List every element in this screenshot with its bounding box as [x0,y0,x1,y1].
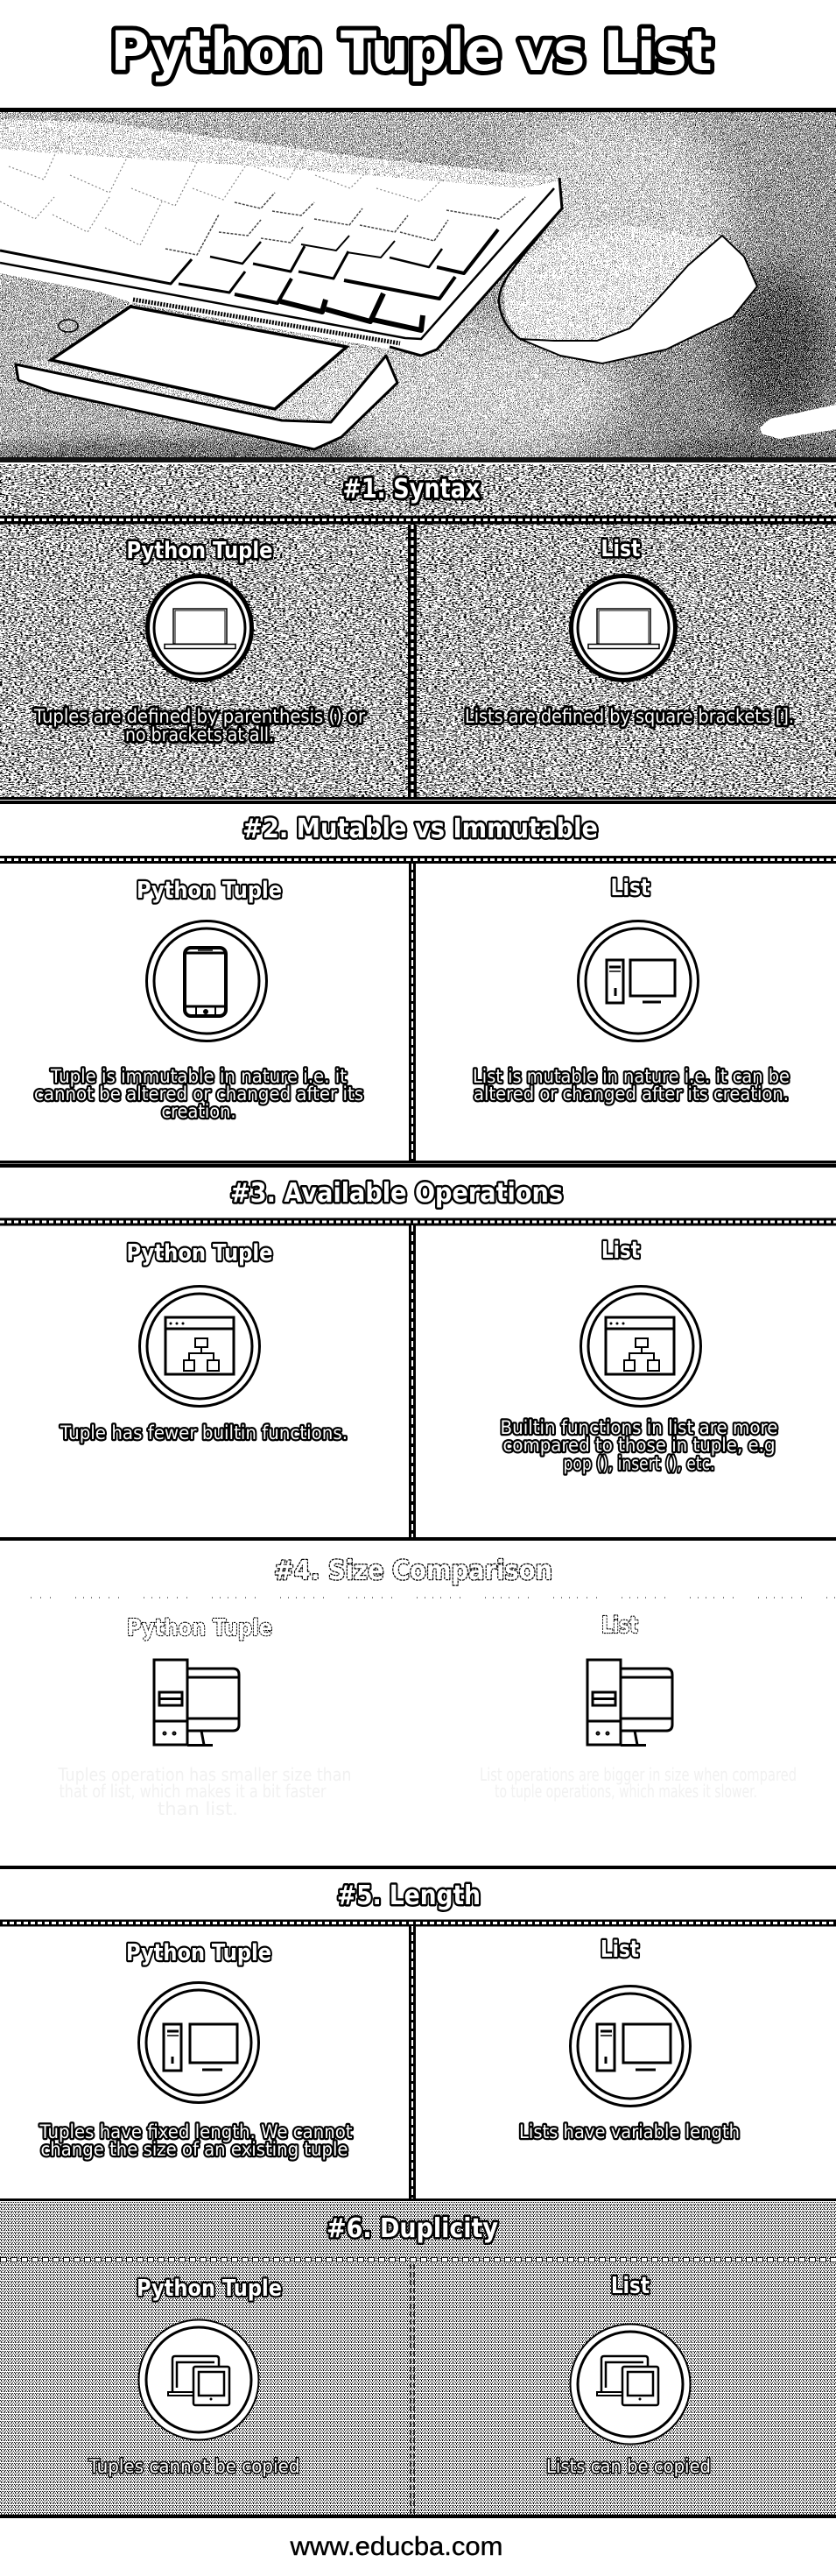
white object bottom right [760,405,836,439]
icon: desktop computer right [571,1987,690,2106]
text: tuple duplicity: Tuples cannot be copied [88,2456,299,2477]
text: list mutability [473,1066,790,1105]
text: tuple size: Tuples operation has smaller size than [58,1764,351,1785]
text: tuple size: than list. [158,1798,238,1819]
heading: available operations: #3. Available Operations [230,1178,563,1209]
text: list syntax: Lists are defined by square brackets []. [465,706,794,727]
label: python tuple: Python Tuple [126,1240,273,1267]
icon: computer tower left [154,1660,239,1745]
label: list: List [601,1238,640,1264]
label: list: List [601,1613,638,1639]
heading: syntax: #1. Syntax [343,474,480,505]
text: list duplicity: Lists can be copied [546,2456,711,2477]
text: tuple mutability: cannot be altered or changed after its [34,1083,363,1105]
text: tuple syntax [33,706,365,745]
keyboard body [0,149,562,356]
phone [16,307,397,449]
icon: laptop and tablet right [571,2325,690,2444]
label: list: List [611,875,650,901]
text: tuple length [39,2121,352,2160]
heading: duplicity: #6. Duplicity [327,2213,498,2244]
panel: section 3 available operations [0,1178,836,1541]
keyboard crisp edges [0,140,562,356]
label: python tuple: Python Tuple [126,1940,271,1966]
icon: laptop left [147,576,252,680]
footer url: www.educba.com [289,2532,502,2561]
text: list mutability: List is mutable in nature i.e. it can be [473,1066,790,1087]
text: list operations: Builtin functions in list are more [501,1417,777,1438]
text: tuple mutability [34,1066,363,1122]
heading: size comparison: #4. Size Comparison [274,1556,552,1586]
text: list operations [501,1417,777,1474]
icon: window sitemap right [581,1286,700,1407]
panel: section 5 length [0,1881,836,2201]
panel: section 2 mutable vs immutable [0,814,836,1168]
heading: mutable vs immutable: #2. Mutable vs Immutable [242,814,598,844]
mouse [499,210,757,363]
text: tuple syntax: Tuples are defined by parenthesis () or [33,706,365,727]
label: python tuple: Python Tuple [137,878,282,904]
icon: desktop computer [578,921,699,1041]
heading: length: #5. Length [337,1881,481,1911]
icon: laptop and tablet left [138,2319,259,2440]
icon: laptop right [571,576,676,680]
text: tuple operations: Tuple has fewer builtin functions. [60,1422,348,1443]
icon: smartphone [147,921,266,1041]
text: list operations: compared to those in tuple, e.g [502,1435,776,1456]
icon: desktop computer left [138,1983,259,2102]
text: list size [480,1764,797,1802]
label: list: List [601,536,641,562]
text: list length: Lists have variable length [519,2121,740,2142]
panel: section 1 syntax [0,464,836,804]
label: list: List [601,1937,639,1963]
text: tuple size [58,1764,351,1819]
text: list operations: pop (), insert (), etc. [564,1453,714,1474]
panel: section 6 duplicity [0,2202,836,2518]
icon: window sitemap left [140,1286,259,1407]
text: tuple mutability: creation. [161,1101,236,1122]
panel: section 4 size comparison [0,1556,836,1869]
text: list mutability: altered or changed after its creation. [474,1083,789,1105]
text: tuple length: change the size of an existing tuple [40,2139,348,2160]
label: python tuple: Python Tuple [126,538,273,564]
text: tuple length: Tuples have fixed length. We cannot [39,2121,352,2142]
photo: keyboard, phone and mouse on desk [0,108,836,475]
icon: computer tower right [587,1660,672,1745]
text: tuple size: that of list, which makes it a bit faster [60,1781,327,1802]
label: list: List [611,2273,650,2299]
title: Python Tuple vs List [110,19,713,83]
label: python tuple: Python Tuple [127,1615,272,1641]
text: tuple mutability: Tuple is immutable in nature i.e. it [50,1066,347,1087]
label: python tuple: Python Tuple [137,2276,282,2302]
text: tuple syntax: no brackets at all. [125,724,274,745]
